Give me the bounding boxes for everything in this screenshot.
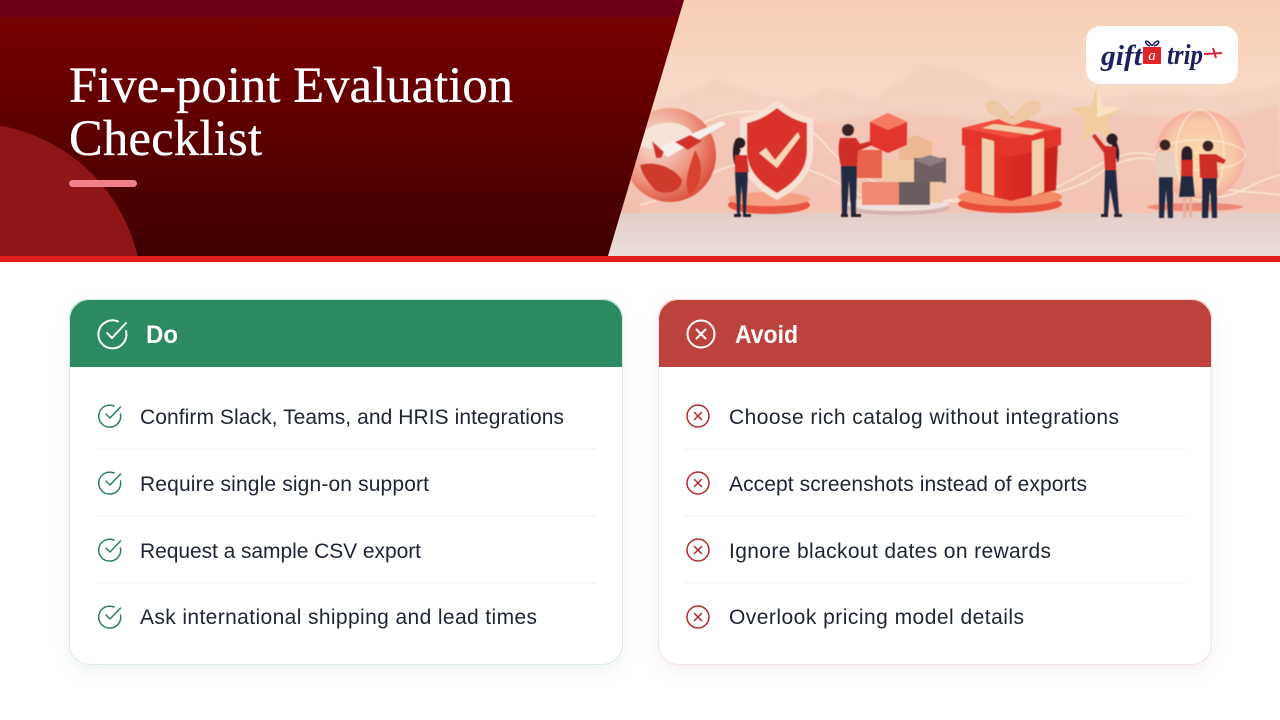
icon: gift box with bow <box>958 100 1062 213</box>
title underline accent <box>69 180 137 187</box>
avoid panel header <box>658 299 1212 367</box>
avoid item 3: Ignore blackout dates on rewards <box>729 540 1051 563</box>
figure: woman with shield <box>733 138 751 217</box>
do item 2: Require single sign-on support <box>140 473 429 496</box>
icon: x circle <box>688 320 714 348</box>
do list <box>96 405 596 629</box>
figures: group of three people <box>1147 140 1243 218</box>
avoid item 4: Overlook pricing model details <box>729 606 1024 629</box>
panel: title background <box>0 0 684 256</box>
avoid item 2: Accept screenshots instead of exports <box>729 473 1087 496</box>
title: Checklist <box>69 110 262 166</box>
icon: gold star <box>1071 86 1123 140</box>
avoid list <box>685 405 1185 629</box>
logo: gift a trip: a <box>1148 48 1156 64</box>
do panel header <box>69 299 623 367</box>
panel: do <box>69 299 623 668</box>
illustration: gifting and travel scene <box>600 0 1280 257</box>
avoid item 1: Choose rich catalog without integrations <box>729 406 1119 429</box>
header banner <box>0 0 1280 262</box>
icon: check circle <box>98 320 126 348</box>
figure: man with cubes <box>839 124 872 217</box>
icon: shield with check on pedestal <box>728 100 813 214</box>
heading: do: Do <box>146 321 178 349</box>
do item 1: Confirm Slack, Teams, and HRIS integrations <box>140 406 564 429</box>
panel: avoid <box>658 299 1212 668</box>
icon: glowing globe <box>1155 110 1245 200</box>
title: Five-point Evaluation <box>69 57 513 113</box>
do item 4: Ask international shipping and lead times <box>140 606 537 629</box>
do item 3: Request a sample CSV export <box>140 540 421 563</box>
logo: gift a trip <box>1086 26 1238 84</box>
icon: stacked cubes on platform <box>846 113 950 215</box>
accent rule under banner <box>0 256 1280 262</box>
title <box>69 57 513 166</box>
logo: gift a trip: gift <box>1100 41 1143 72</box>
icon: globe with plane <box>624 108 726 202</box>
figure: woman reaching for star <box>1092 134 1122 217</box>
logo: gift a trip: trip <box>1167 40 1203 71</box>
heading: avoid: Avoid <box>735 321 798 349</box>
